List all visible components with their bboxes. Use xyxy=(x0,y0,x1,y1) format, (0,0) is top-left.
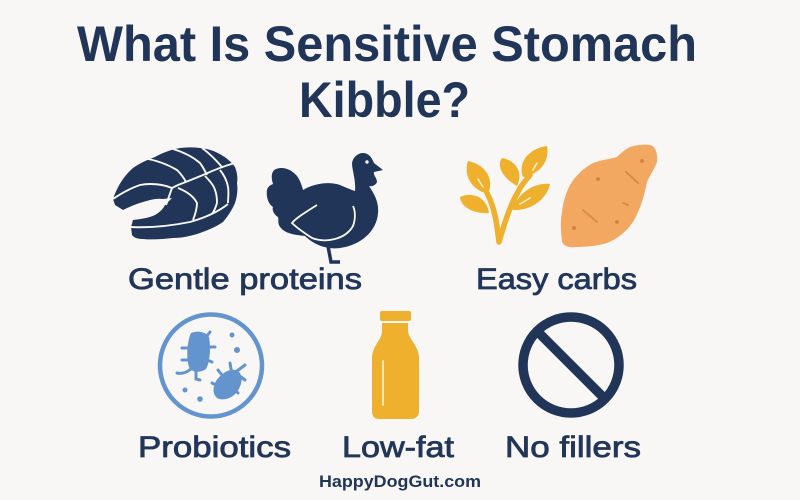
label: low-fat: Low-fat xyxy=(342,431,455,464)
icon: probiotics dish xyxy=(160,314,262,416)
icon: sweet potato xyxy=(561,145,657,247)
icon: salmon steak xyxy=(113,147,237,239)
label: easy carbs: Easy carbs xyxy=(476,263,637,296)
title: Kibble? xyxy=(299,72,470,128)
icon: oil bottle xyxy=(372,311,419,419)
title: What Is Sensitive Stomach xyxy=(77,16,697,72)
title xyxy=(77,16,697,128)
label: no fillers: No fillers xyxy=(505,431,641,464)
icon: wheat sprig xyxy=(460,146,550,242)
website credit: HappyDogGut.com xyxy=(319,472,481,491)
label: probiotics: Probiotics xyxy=(138,431,291,464)
icon: turkey xyxy=(267,153,383,262)
label: gentle proteins: Gentle proteins xyxy=(128,263,362,296)
icon: no symbol xyxy=(523,317,619,413)
